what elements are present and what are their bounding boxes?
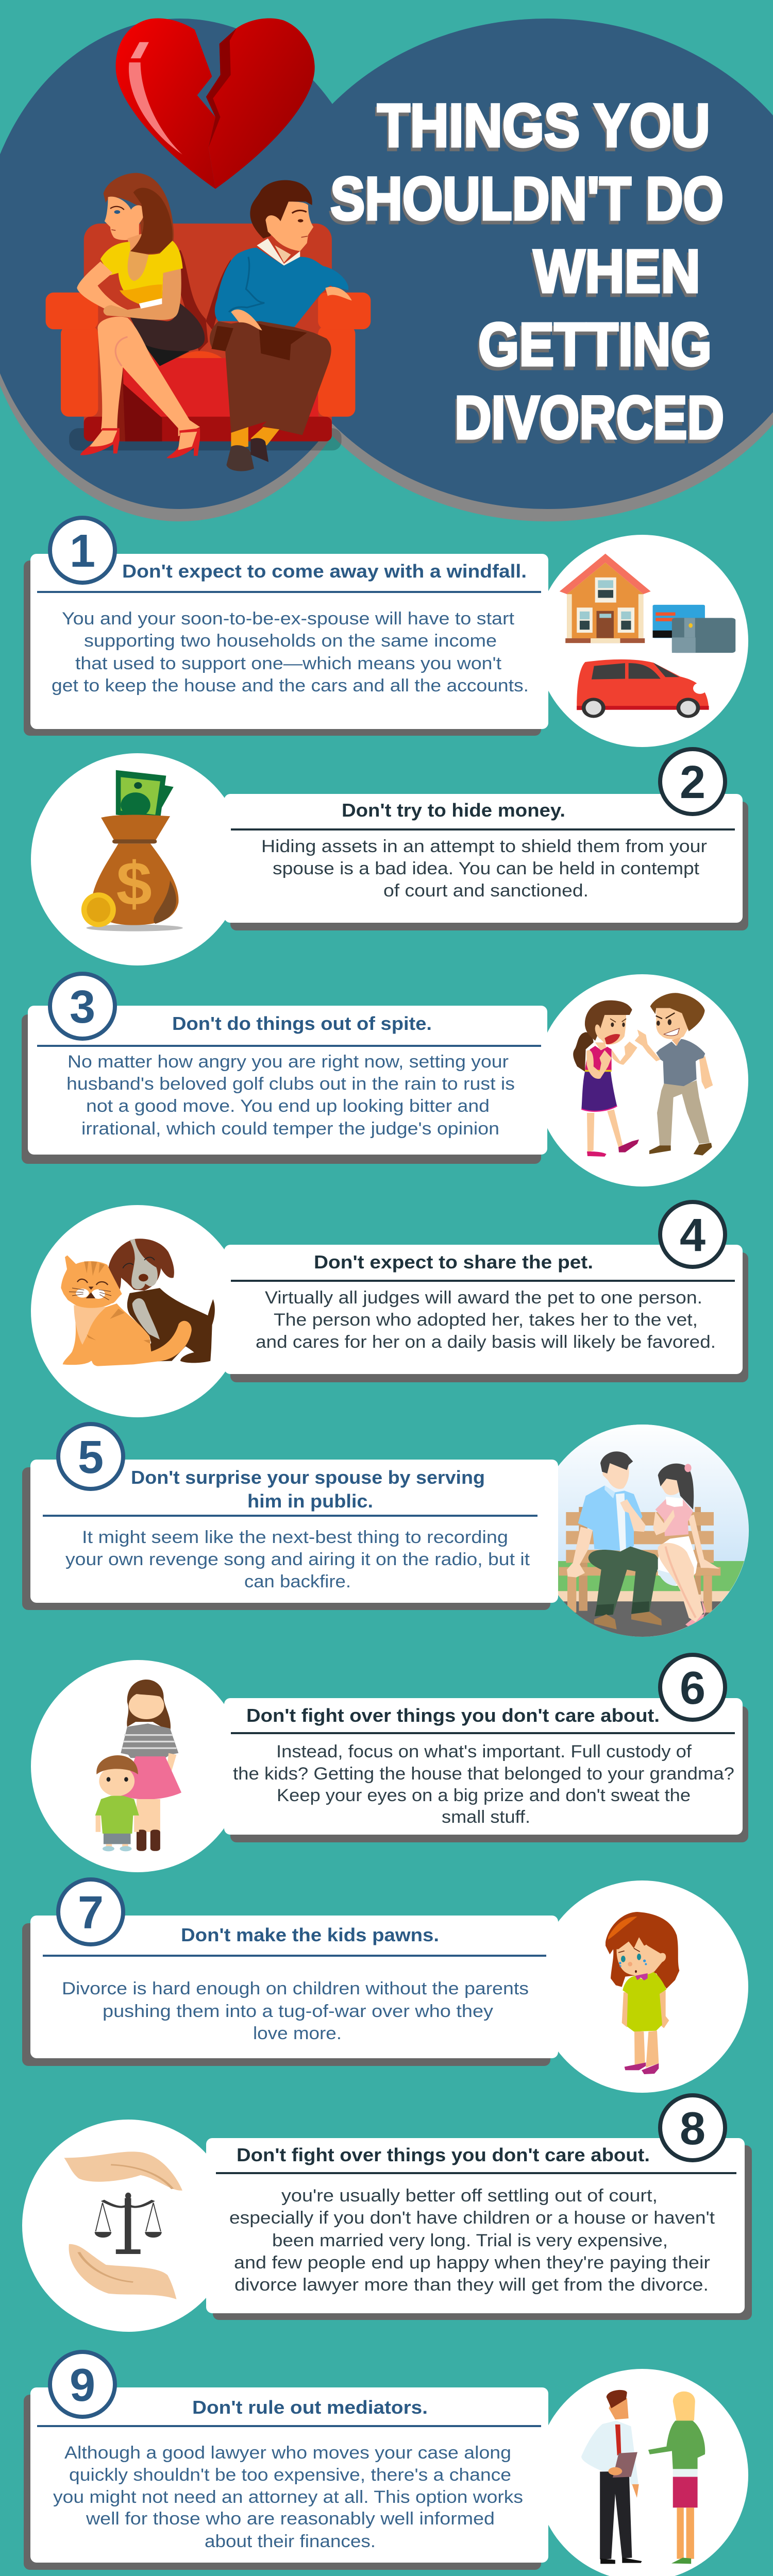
number badge 4 [660, 1202, 725, 1267]
panel: tip 3 [22, 974, 748, 1187]
body text: you're usually better off settling out of court, [281, 2186, 658, 2206]
girl [573, 1001, 639, 1157]
heading [131, 1467, 485, 1512]
illustration circle: hands and scales of justice [22, 2120, 234, 2332]
number badge 7: 7 [78, 1887, 104, 1939]
body text: Hiding assets in an attempt to shield them from your [261, 837, 707, 856]
heading: him in public. [247, 1490, 373, 1512]
panel: tip 5 [22, 1422, 754, 1637]
sofa [46, 224, 371, 450]
heading: Don't try to hide money. [342, 800, 565, 821]
body text: love more. [253, 2024, 342, 2043]
number badge 3 [50, 974, 115, 1039]
body text: your own revenge song and airing it on the radio, but it [65, 1550, 530, 1569]
body text: pushing them into a tug-of-war over who they [103, 2002, 493, 2021]
panel: tip 8 [22, 2095, 752, 2332]
heading: Don't expect to share the pet. [314, 1251, 593, 1273]
panel card [22, 1916, 558, 2066]
panel: tip 6 [31, 1655, 748, 1872]
illustration circle: mother and child [31, 1660, 244, 1872]
illustration circle: money bag: $ [116, 849, 152, 918]
body text [233, 1742, 734, 1827]
illustration circle: money bag [31, 753, 244, 965]
panel card [24, 2387, 548, 2570]
illustration circle: lawyer and client [536, 2369, 748, 2576]
number badge 1: 1 [70, 526, 95, 577]
panel card [206, 2138, 752, 2320]
body text [66, 1052, 515, 1139]
body text [53, 2443, 523, 2551]
body text: The person who adopted her, takes her to the vet, [274, 1310, 698, 1330]
body text: No matter how angry you are right now, setting your [68, 1052, 509, 1072]
number badge 5: 5 [78, 1432, 104, 1483]
body text: irrational, which could temper the judge's opinion [81, 1119, 499, 1139]
icon: broken heart [116, 18, 315, 189]
body text: It might seem like the next-best thing to recording [82, 1528, 508, 1547]
body text: well for those who are reasonably well informed [86, 2509, 495, 2529]
number badge 9 [50, 2352, 115, 2417]
body text [261, 837, 707, 901]
title: DIVORCED [455, 384, 724, 452]
body text: especially if you don't have children or a house or haven't [229, 2208, 715, 2228]
illustration circle: cat and dog [31, 1205, 244, 1417]
body text: You and your soon-to-be-ex-spouse will have to start [62, 609, 515, 629]
body text: Keep your eyes on a big prize and don't sweat the [277, 1786, 691, 1805]
heading: Don't fight over things you don't care about. [246, 1705, 660, 1726]
panel: tip 9 [24, 2352, 748, 2576]
panel: tip 7 [22, 1879, 748, 2093]
illustration circle: house, cards and car [536, 535, 748, 747]
body text: and cares for her on a daily basis will likely be favored. [256, 1332, 716, 1352]
illustration circle: crying child [536, 1880, 748, 2093]
body text: that used to support one—which means you won't [75, 654, 502, 673]
body text: quickly shouldn't be too expensive, there's a chance [69, 2465, 511, 2485]
panel card [22, 1006, 547, 1164]
number badge 1 [50, 518, 115, 583]
heading: Don't surprise your spouse by serving [131, 1467, 485, 1488]
body text: divorce lawyer more than they will get from the divorce. [234, 2275, 709, 2295]
body text: supporting two households on the same income [84, 631, 497, 651]
body text: small stuff. [442, 1807, 530, 1827]
heading: Don't do things out of spite. [172, 1013, 432, 1034]
body text: of court and sanctioned. [383, 881, 589, 901]
number badge 8: 8 [680, 2103, 705, 2155]
body text: about their finances. [205, 2532, 376, 2551]
panel: tip 1 [24, 518, 748, 747]
body text: husband's beloved golf clubs out in the rain to rust is [66, 1074, 515, 1094]
body text [52, 609, 529, 696]
body text: Although a good lawyer who moves your case along [64, 2443, 511, 2463]
body text [62, 1979, 529, 2043]
panel: tip 4 [31, 1202, 748, 1417]
body text: get to keep the house and the cars and all the accounts. [52, 676, 529, 696]
body text: can backfire. [244, 1572, 351, 1591]
number badge 6: 6 [680, 1663, 705, 1714]
panel card [22, 1460, 558, 1610]
body text: not a good move. You end up looking bitter and [86, 1096, 490, 1116]
number badge 5 [58, 1424, 123, 1489]
title: DIVORCED [453, 387, 722, 455]
number badge 3: 3 [70, 981, 95, 1033]
panel: tip 2 [31, 749, 748, 965]
title: THINGS YOU [376, 95, 709, 163]
panel card [224, 1698, 748, 1842]
title: THINGS YOU [377, 92, 710, 160]
title [329, 92, 724, 455]
body text: spouse is a bad idea. You can be held in contempt [273, 859, 700, 878]
heading: Don't expect to come away with a windfall. [122, 561, 527, 582]
body text: you might not need an attorney at all. This option works [53, 2487, 523, 2507]
body text [65, 1528, 530, 1591]
number badge 4: 4 [680, 1210, 705, 1261]
man [210, 180, 352, 471]
woman [77, 173, 205, 458]
title: WHEN [532, 241, 699, 309]
number badge 7 [58, 1879, 123, 1944]
body text: Divorce is hard enough on children without the parents [62, 1979, 529, 1998]
body text: Virtually all judges will award the pet to one person. [265, 1288, 702, 1308]
number badge 2: 2 [680, 757, 705, 808]
boy [635, 993, 713, 1156]
number badge 6 [660, 1655, 725, 1720]
title: GETTING [478, 311, 712, 379]
body text: Instead, focus on what's important. Full custody of [276, 1742, 692, 1761]
body text [256, 1288, 716, 1352]
illustration circle: arguing couple [536, 974, 748, 1187]
heading: Don't rule out mediators. [192, 2397, 428, 2418]
number badge 2 [660, 749, 725, 814]
body text [229, 2186, 715, 2295]
illustration circle: couple on a bench [558, 1425, 749, 1637]
title: WHEN [533, 238, 700, 306]
panel card [224, 794, 748, 930]
header background ovals [0, 19, 773, 521]
title: GETTING [477, 314, 710, 382]
panel card [24, 554, 548, 736]
body text: and few people end up happy when they're paying their [234, 2253, 710, 2273]
number badge 9: 9 [70, 2360, 95, 2411]
body text: the kids? Getting the house that belonged to your grandma? [233, 1764, 734, 1784]
heading: Don't make the kids pawns. [181, 1924, 439, 1945]
illustration: couple on sofa [46, 173, 371, 471]
panel card [224, 1245, 748, 1382]
heading: Don't fight over things you don't care about. [237, 2144, 650, 2165]
number badge 8 [660, 2095, 725, 2160]
body text: been married very long. Trial is very expensive, [272, 2231, 668, 2250]
